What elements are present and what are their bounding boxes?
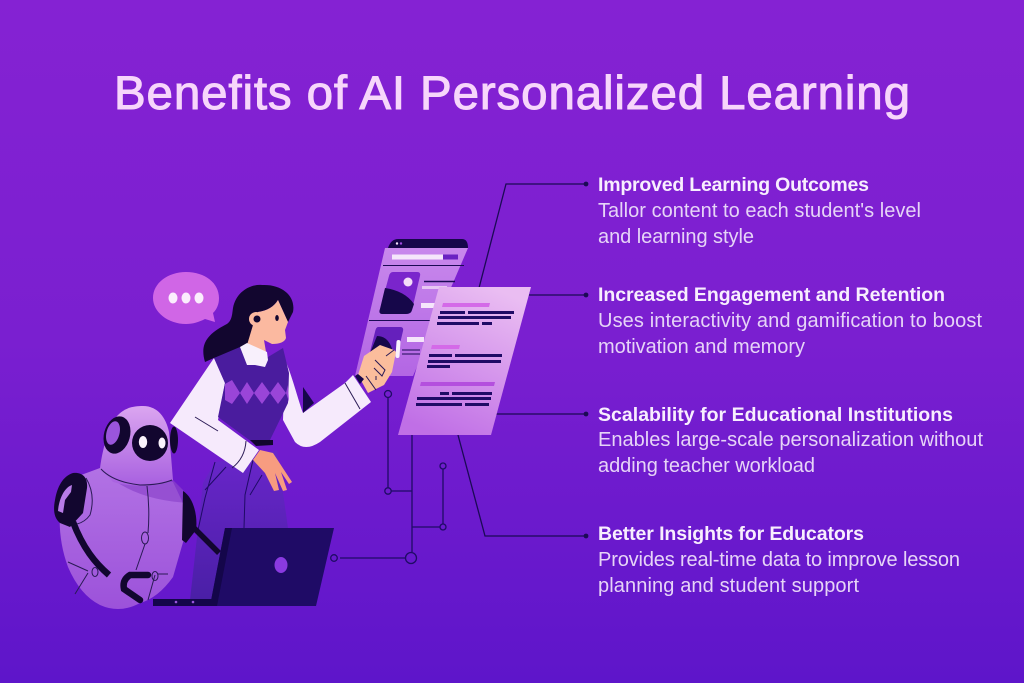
laptop — [153, 528, 334, 606]
benefit: scalability for educational institutions: Scalability for Educational Institutions — [598, 404, 953, 426]
panel body — [355, 248, 468, 376]
trousers — [190, 450, 288, 600]
robot ears — [100, 413, 134, 457]
belt — [250, 440, 273, 446]
collar — [240, 343, 268, 367]
benefit: increased engagement and retention — [598, 284, 982, 358]
benefit: increased engagement and retention: Uses interactivity and gamification to boost — [598, 310, 982, 332]
robot seams — [68, 486, 168, 600]
hand raised — [358, 345, 396, 393]
image card 1 — [379, 272, 420, 314]
back app panel — [355, 239, 468, 376]
title: Benefits of AI Personalized Learning — [114, 67, 910, 120]
benefit: better insights for educators — [598, 523, 960, 597]
panel top bar — [388, 239, 468, 248]
vest — [214, 347, 289, 442]
robot — [54, 406, 219, 609]
benefit: improved learning outcomes: Tallor content to each student's level — [598, 200, 921, 222]
benefit: better insights for educators: Provides real-time data to improve lesson — [598, 549, 960, 571]
face — [247, 300, 288, 356]
robot body — [60, 468, 190, 609]
lower hand — [253, 450, 292, 491]
robot head — [100, 406, 173, 486]
benefit: improved learning outcomes — [598, 174, 921, 248]
connector lines to benefits — [458, 182, 588, 538]
right arm — [283, 360, 371, 447]
benefit: improved learning outcomes: Improved Learning Outcomes — [598, 174, 869, 196]
document text lines — [416, 311, 514, 406]
benefit: scalability for educational institutions — [598, 404, 983, 477]
benefit: increased engagement and retention: Increased Engagement and Retention — [598, 284, 945, 306]
benefit: increased engagement and retention: motivation and memory — [598, 336, 805, 358]
hair — [203, 285, 293, 362]
robot gripper — [124, 575, 148, 600]
benefit: better insights for educators: Better Insights for Educators — [598, 523, 864, 545]
benefit: scalability for educational institutions: Enables large-scale personalization without — [598, 429, 983, 451]
benefit: better insights for educators: planning and student support — [598, 575, 859, 597]
robot face visor — [132, 425, 168, 461]
image card 2 — [368, 327, 403, 360]
woman figure — [170, 285, 401, 600]
benefit: improved learning outcomes: and learning style — [598, 226, 754, 248]
document sheet — [398, 287, 531, 435]
robot shoulder and arm — [54, 473, 87, 527]
benefit: scalability for educational institutions: adding teacher workload — [598, 455, 815, 477]
robot right arm — [182, 491, 196, 543]
left arm — [170, 358, 259, 473]
speech bubble — [153, 272, 219, 324]
circuit lines — [331, 390, 446, 564]
